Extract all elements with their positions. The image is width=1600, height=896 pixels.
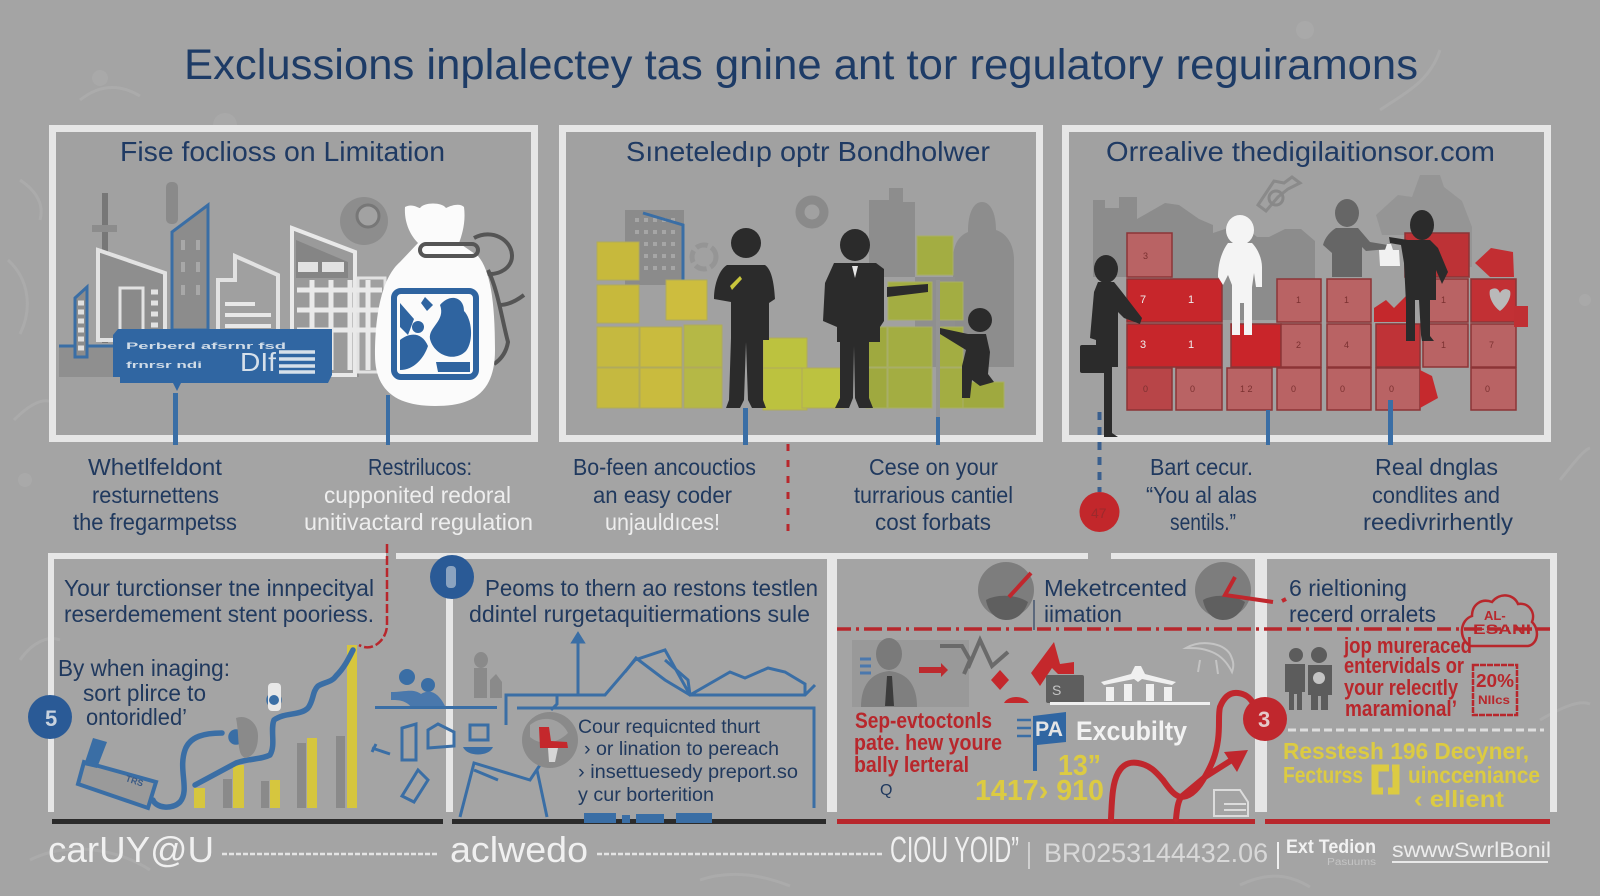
caption: column 3: unjauldıces! [605, 509, 720, 535]
text: side note: By when inaging: [58, 655, 230, 681]
text: yellow figures [975, 750, 1104, 807]
footer [48, 829, 1551, 870]
text: market [1044, 575, 1187, 627]
text: relationship: 6 rieltioning [1289, 575, 1407, 601]
icon: small blue pictograms [372, 669, 497, 802]
text: relationship: recerd orralets [1289, 601, 1436, 627]
text: intro two: ddintel rurgetaquitiermations sule [469, 601, 810, 627]
heading: limitation: Fise foclioss on Limitation [120, 136, 445, 167]
chart: red block grid: 0 [1485, 384, 1490, 394]
text: yellow note: Fecturss [1283, 762, 1363, 788]
text: intro two: Peoms to thern ao restons testlen [485, 575, 818, 601]
icon: globe two [1195, 562, 1286, 620]
connector: red dashed curve [359, 544, 387, 647]
icon: child [940, 308, 994, 398]
text: red note: bally lerteral [854, 752, 969, 777]
text: side note: sort plirce to [83, 680, 206, 706]
text: list: › insettuesedy preport.so [578, 761, 798, 783]
text: red note: pate. hew youre [854, 730, 1002, 755]
text: market: Meketrcented [1044, 575, 1187, 601]
chart: red block grid: 1 [1441, 295, 1446, 305]
text: intro one: reserdemement stent pooriess. [64, 601, 374, 627]
line: white dotted divider [1288, 728, 1544, 732]
footer: reference number: BR0253144432.06 [1044, 838, 1268, 868]
icon: grey smudge [236, 717, 258, 758]
text: red list: your relecıtly [1344, 675, 1459, 700]
text: relationship [1289, 575, 1436, 627]
chart: blue line mountains [460, 634, 815, 817]
chart: red block grid [1127, 233, 1528, 410]
heading: bondholder: Sıneteledıp optr Bondholwer [626, 136, 990, 167]
caption: column 5: Bart cecur. [1150, 454, 1253, 480]
text: yellow figures: 13” [1058, 750, 1101, 782]
caption: column 1: Whetlfeldont [88, 454, 222, 480]
panel: limitation [52, 128, 534, 438]
icon: grey person [474, 652, 502, 698]
bar chart [194, 645, 357, 808]
caption: column 1 [73, 454, 237, 535]
icon: woman with briefcase [1080, 255, 1142, 437]
footer: brand three: CIOU YOID” [890, 829, 1019, 870]
chart: red block grid: 3 [1140, 339, 1146, 351]
icon: card: TRS [124, 773, 145, 788]
icon: money bag [375, 204, 524, 406]
caption: column 6: condlites and [1372, 482, 1500, 508]
illustration: grey skyline [1093, 175, 1472, 320]
text: list: y cur borterition [578, 784, 714, 806]
text: list: › or lination to pereach [584, 738, 779, 760]
icon: card [78, 738, 156, 808]
icon: person left [714, 228, 775, 408]
panel: growth chart block [28, 575, 497, 808]
text: intro one: Your turctionser tne innpecityal [64, 575, 374, 601]
chart: red block grid: 7 [1489, 340, 1494, 350]
text: red note: Sep-evtoctonls [855, 708, 992, 733]
icon: bank building [1050, 666, 1210, 705]
chart: red block grid: 1 [1188, 294, 1194, 306]
panel: bondholder [562, 128, 1040, 438]
footer: extension: Pasuums [1327, 857, 1376, 868]
icon: 20 percent stamp [1473, 665, 1517, 715]
caption: column 1: resturnettens [92, 482, 219, 508]
icon: green blocks [866, 236, 1004, 408]
chart: red block grid: 1 [1344, 295, 1349, 305]
chart: red block grid: 0 [1389, 384, 1394, 394]
chart: red block grid: 0 [1190, 384, 1195, 394]
icon: dark figure [1389, 210, 1448, 341]
chart: red block grid: 0 [1340, 384, 1345, 394]
caption: column 4: turrarious cantiel [854, 482, 1013, 508]
chart: red block grid: 2 [1296, 340, 1301, 350]
banner: blue sign: Perberd afsrnr fsd [126, 341, 286, 351]
icon: small white car [1214, 790, 1248, 816]
caption: column 2: cupponited redoral [324, 482, 511, 508]
chart: red block grid: 1 [1188, 339, 1194, 351]
text: list [578, 716, 798, 806]
line: grey pointer [936, 280, 940, 417]
chart: red block grid: 0 [1291, 384, 1296, 394]
footer: extension: Ext Tedion [1286, 837, 1376, 858]
caption: column 4: Cese on your [869, 454, 998, 480]
banner: blue sign: frnrsr ndi [126, 360, 202, 370]
footer: brand one: carUY@U [48, 829, 214, 870]
chart: red block grid: 1 [1296, 295, 1301, 305]
illustration: grey background shapes [625, 188, 1014, 367]
badge: blue circle left [28, 695, 72, 739]
icon: two people [1285, 647, 1332, 710]
text: yellow note: uincceniance [1408, 762, 1540, 788]
chart: red block grid: 7 [1140, 294, 1146, 306]
text: side note: ontoridled’ [86, 704, 187, 730]
caption: column 3: Bo-feen ancouctios [573, 454, 756, 480]
caption: column 5 [1146, 454, 1257, 535]
caption: column 4: cost forbats [875, 509, 991, 535]
icon: globe with red flag [522, 712, 578, 768]
badge: blue circle left: 5 [45, 706, 57, 731]
line: blue growth curve [153, 650, 353, 807]
connector lines from panels [173, 393, 1393, 536]
text: list: Cour requicnted thurt [578, 716, 761, 738]
bottom panel frames [48, 553, 1557, 824]
panel: digital [1066, 128, 1548, 438]
caption: column 3: an easy coder [593, 482, 732, 508]
text: letter Q: Q [880, 782, 892, 799]
text: red list [1343, 633, 1472, 721]
icon: red cloud: ESANI [1473, 621, 1531, 637]
icon: faint outline [1186, 643, 1233, 674]
caption: column 5: sentils.” [1170, 509, 1236, 535]
badge: red circle two: 3 [1258, 707, 1270, 732]
badge: blue circle top [430, 555, 474, 599]
icon: PA flag [1017, 712, 1066, 771]
badge: red circle: 47 [1091, 505, 1107, 521]
text: yellow note: ‹ ellient [1414, 786, 1504, 812]
icon: market signals: S [1052, 682, 1061, 698]
caption: column 4 [854, 454, 1013, 535]
text: intro two [469, 575, 818, 627]
icon: yellow recycle [1375, 768, 1396, 791]
caption: column 3 [573, 454, 756, 535]
caption: column 5: “You al alas [1146, 482, 1257, 508]
chart: red block grid: 1 2 [1240, 384, 1253, 394]
panel: relationship block [1283, 575, 1544, 812]
icon: white figure [1218, 215, 1262, 335]
text: red note [854, 708, 1002, 777]
text: yellow note: Resstesh 196 Decyner, [1283, 738, 1529, 764]
icon: city skyline [59, 182, 388, 377]
caption: column 2: Restrilucos: [368, 454, 472, 480]
text: yellow figures: 1417› 910 [975, 775, 1104, 807]
footer: extension [1286, 837, 1376, 868]
icon: red cloud [1462, 595, 1537, 646]
caption: column 2 [304, 454, 533, 535]
text: intro one [64, 575, 374, 627]
caption: column 1: the fregarmpetss [73, 509, 237, 535]
icon: yellow blocks [597, 242, 844, 410]
badge: red circle [1080, 492, 1120, 532]
arrow: red curve [1111, 693, 1253, 819]
icon: white document [1379, 244, 1400, 266]
caption: column 6 [1363, 454, 1513, 535]
icon: businessman [852, 638, 969, 707]
icon: globe one [978, 562, 1034, 630]
icon: 20 percent stamp: 20% [1476, 671, 1514, 691]
chart: red block grid: 0 [1143, 384, 1148, 394]
footer: brand two: aclwedo [450, 829, 588, 870]
caption: column 6: reedivrirhently [1363, 509, 1513, 535]
text: red list: jop mureraced [1343, 633, 1472, 658]
caption: column 2: unitivactard regulation [304, 509, 533, 535]
icon: blue footer marks [584, 813, 712, 823]
banner: blue sign: DIf [240, 347, 277, 377]
icon: person centre [823, 229, 928, 408]
panel: requirements block [460, 575, 818, 823]
chart: red block grid: 1 [1441, 340, 1446, 350]
banner: blue sign [113, 329, 332, 391]
chart: red block grid: 4 [1344, 340, 1349, 350]
title: Exclussions inplalectey tas gnine ant tor regulatory reguiramons [184, 41, 1418, 89]
heading: digital: Orrealive thedigilaitionsor.com [1106, 136, 1495, 167]
line: red dashed divider [837, 627, 1550, 631]
footer: website: swwwSwrlBonil [1392, 839, 1551, 862]
text: excubility: Excubilty [1076, 716, 1187, 746]
panel: market block [837, 562, 1550, 819]
icon: market signals [940, 640, 1084, 703]
icon: PA flag: PA [1035, 718, 1063, 741]
icon: red cloud: AL- [1484, 608, 1506, 623]
text: market: iimation [1044, 601, 1122, 627]
badge: red circle two [1243, 697, 1287, 741]
caption: column 6: Real dnglas [1375, 454, 1498, 480]
chart: red block grid: 3 [1143, 251, 1148, 261]
text: side note [58, 655, 230, 730]
text: yellow note [1283, 738, 1540, 812]
icon: grey figure [1323, 199, 1388, 277]
icon: 20 percent stamp: NIIcs [1478, 693, 1510, 707]
text: red list: maramional’ [1345, 696, 1457, 721]
icon: bottle [268, 683, 281, 711]
text: red list: entervidals or [1344, 653, 1464, 678]
